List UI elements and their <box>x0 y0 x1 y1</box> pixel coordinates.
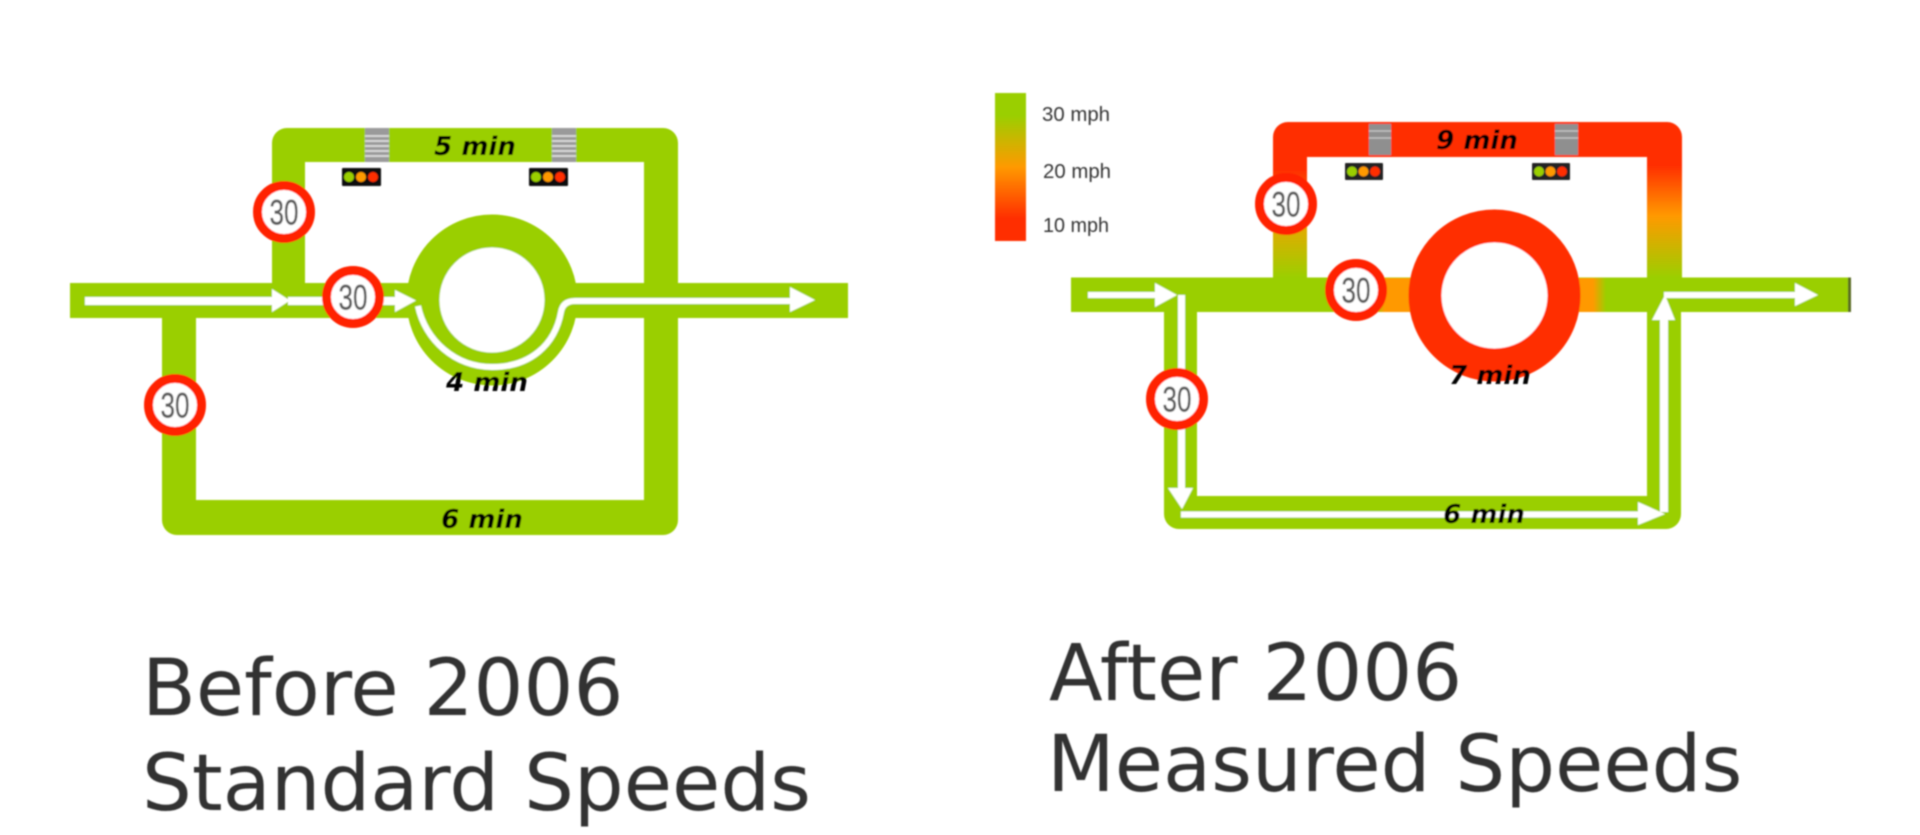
traffic light left <box>342 168 381 186</box>
speed sign 30 lower <box>1150 372 1204 426</box>
speed sign 30 upper: 30 <box>270 194 298 232</box>
road: upper route left leg <box>1273 150 1307 282</box>
speed sign 30 upper <box>1260 178 1312 230</box>
speed sign 30 middle: 30 <box>1342 272 1370 310</box>
speed sign 30 upper <box>258 186 310 238</box>
speed sign 30 lower <box>148 378 202 432</box>
legend: speed colour scale: 10 mph <box>1043 215 1109 237</box>
road end cap <box>1848 278 1851 312</box>
road: lower route <box>162 310 678 535</box>
legend: speed colour scale <box>995 93 1111 241</box>
road: roundabout ring <box>423 231 561 369</box>
time label lower route: 6 min <box>1443 500 1525 530</box>
traffic light left <box>1345 163 1383 180</box>
time label upper route: 5 min <box>434 132 516 162</box>
traffic light right <box>529 168 568 186</box>
time label roundabout: 4 min <box>445 368 528 398</box>
heading: before 2006: Before 2006 <box>142 642 623 734</box>
speed sign 30 middle <box>1330 264 1382 316</box>
speed sign 30 upper: 30 <box>1272 186 1300 224</box>
legend: speed colour scale: 30 mph <box>1042 104 1110 126</box>
arrow: route through roundabout <box>85 287 815 367</box>
road: lower route <box>1164 305 1681 529</box>
pedestrian crossing left <box>365 128 389 162</box>
legend: speed colour scale: 20 mph <box>1043 161 1111 183</box>
road: upper route congested top <box>1273 122 1682 170</box>
pedestrian crossing right <box>1555 124 1578 155</box>
panel: after 2006 measured speeds diagram <box>995 93 1851 530</box>
pedestrian crossing left <box>1369 124 1391 155</box>
road: upper route right leg <box>1647 150 1682 282</box>
road: slow exit right <box>1578 278 1606 312</box>
speed sign 30 middle <box>326 270 380 324</box>
pedestrian crossing right <box>552 128 576 162</box>
time label upper route: 9 min <box>1436 126 1518 156</box>
heading: after 2006: After 2006 <box>1049 627 1462 719</box>
panel: before 2006 standard speeds diagram <box>70 128 848 535</box>
time label roundabout: 7 min <box>1449 361 1531 391</box>
road: congested roundabout ring <box>1425 226 1564 365</box>
arrow: route via lower road <box>1088 283 1818 525</box>
road: main east-west road <box>70 283 848 318</box>
speed sign 30 lower: 30 <box>160 386 190 426</box>
road: upper route <box>272 128 678 290</box>
traffic light right <box>1532 163 1570 180</box>
speed sign 30 lower: 30 <box>1162 380 1192 420</box>
time label lower route: 6 min <box>441 505 523 535</box>
speed sign 30 middle: 30 <box>338 278 368 318</box>
heading: before 2006: Standard Speeds <box>142 737 811 829</box>
heading: after 2006: Measured Speeds <box>1047 718 1742 810</box>
road: main east-west road <box>1071 278 1849 312</box>
road: slow approach left <box>1375 278 1411 312</box>
